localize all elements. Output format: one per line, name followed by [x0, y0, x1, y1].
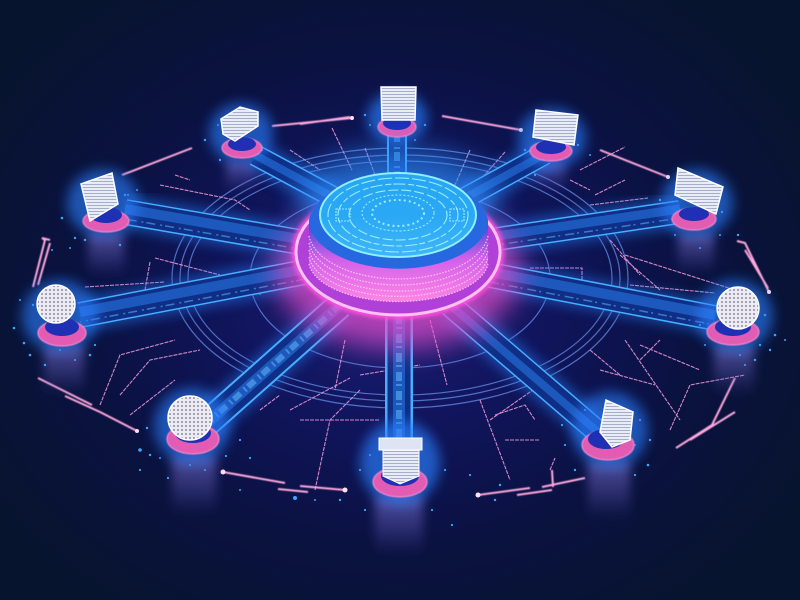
node reflections	[44, 160, 754, 555]
node: bottom left sphere	[154, 388, 230, 464]
circuit traces	[85, 128, 745, 490]
node: top document	[367, 87, 427, 144]
hub blue rim	[309, 175, 488, 269]
node: right sphere	[697, 280, 773, 352]
beam: bottom	[385, 315, 413, 462]
beam: bottom right	[450, 305, 598, 432]
node: bottom right document	[572, 392, 648, 468]
spoke beams	[80, 122, 715, 465]
beam: left	[80, 269, 305, 322]
particles	[13, 104, 786, 526]
central hub	[276, 150, 520, 348]
node: right document	[661, 168, 733, 237]
node: top right document	[518, 108, 586, 168]
beam: top right	[465, 154, 545, 198]
node: upper left document	[67, 169, 139, 237]
hub base ring	[296, 189, 500, 315]
node: top left document	[209, 103, 273, 163]
beam: bottom left	[205, 305, 340, 425]
circuit rings	[172, 148, 628, 408]
node: left sphere	[22, 280, 98, 352]
beam: top left	[255, 155, 335, 198]
hub blue glow	[298, 150, 498, 250]
hub pink glow	[276, 196, 520, 348]
node: bottom document	[360, 421, 440, 505]
hub ring glow	[296, 189, 500, 315]
beam: upper left	[125, 209, 305, 250]
hub top face	[320, 173, 476, 257]
hub side pattern	[309, 236, 488, 302]
beam: top	[387, 122, 407, 180]
beam: right lower	[490, 272, 715, 325]
hub circuit pattern	[328, 178, 468, 252]
outer glowing segments	[33, 116, 771, 498]
beam: right	[490, 209, 680, 246]
hub side wall	[309, 222, 488, 302]
